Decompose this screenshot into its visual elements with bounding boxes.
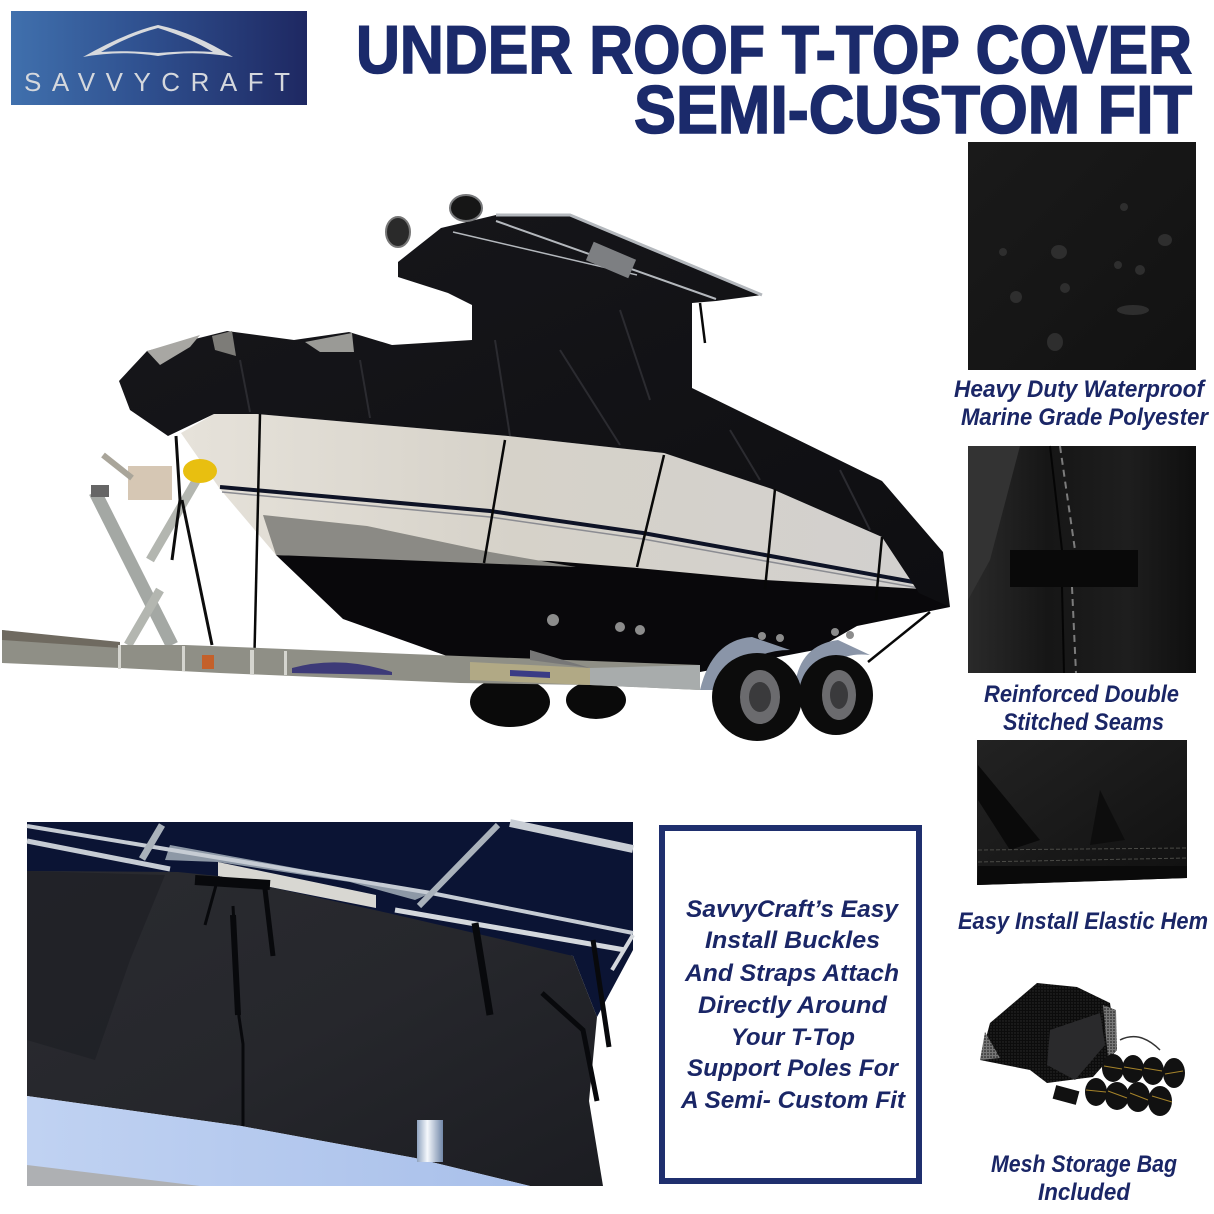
caption: seams xyxy=(984,681,1179,736)
tie-down straps xyxy=(254,303,930,674)
lower deck rail xyxy=(27,1165,200,1186)
logo: SavvyCraft xyxy=(11,11,307,105)
cover folds xyxy=(240,310,870,530)
caption: waterproof xyxy=(954,376,1210,431)
caption: seams: Stitched Seams xyxy=(1003,709,1164,736)
trailer tires behind xyxy=(470,677,626,727)
callout: easy install buckles: Directly Around xyxy=(698,992,888,1019)
yellow bow roller xyxy=(183,459,217,483)
callout: easy install buckles: A Semi- Custom Fit xyxy=(680,1087,906,1114)
feature image: mesh storage bag xyxy=(980,983,1185,1116)
callout: easy install buckles xyxy=(662,828,919,1181)
caption: mesh bag: Mesh Storage Bag xyxy=(991,1151,1177,1178)
light blue deck xyxy=(27,1096,530,1186)
hull lower black cover xyxy=(276,555,950,672)
velcro strap xyxy=(1010,550,1138,587)
feature image: elastic hem xyxy=(977,740,1187,885)
straps and zipper xyxy=(195,878,609,1126)
T-top rails xyxy=(27,823,633,970)
caption: mesh bag: Included xyxy=(1038,1179,1131,1206)
hull shading xyxy=(263,515,576,567)
feature image: waterproof polyester xyxy=(968,142,1196,370)
callout: easy install buckles: SavvyCraft’s Easy xyxy=(686,896,900,923)
speakers xyxy=(386,195,482,247)
feature image: double stitched seams xyxy=(968,446,1196,673)
boat cover upper xyxy=(119,215,950,607)
fabric cover xyxy=(27,871,603,1186)
title xyxy=(356,12,1192,148)
trailer wheels xyxy=(712,653,873,741)
trailer fenders xyxy=(700,637,870,690)
main photo: covered boat on trailer xyxy=(2,195,950,741)
fabric folds xyxy=(27,871,165,1060)
trailer beam xyxy=(2,614,854,690)
logo: SavvyCraft: SAVVYCRAFT xyxy=(24,67,290,97)
caption: mesh bag xyxy=(991,1151,1177,1206)
callout: easy install buckles: Your T-Top xyxy=(731,1024,855,1051)
photo: T-top cover close-up xyxy=(27,822,633,1186)
cover highlights xyxy=(147,331,354,365)
caption: waterproof: Heavy Duty Waterproof xyxy=(954,376,1206,403)
callout: easy install buckles: Install Buckles xyxy=(705,927,880,954)
bow strap xyxy=(172,436,212,645)
rod holder pole xyxy=(417,1120,443,1162)
callout: easy install buckles: Support Poles For xyxy=(687,1055,900,1082)
icon: boat roof arc xyxy=(83,25,233,57)
callout: easy install buckles: And Straps Attach xyxy=(684,960,899,987)
trailer winch stand xyxy=(91,455,196,645)
sky and roof underside xyxy=(27,822,633,1017)
hull pinstripe xyxy=(220,487,919,588)
hull white side xyxy=(181,414,922,589)
caption: seams: Reinforced Double xyxy=(984,681,1179,708)
T-top frame xyxy=(453,215,762,299)
